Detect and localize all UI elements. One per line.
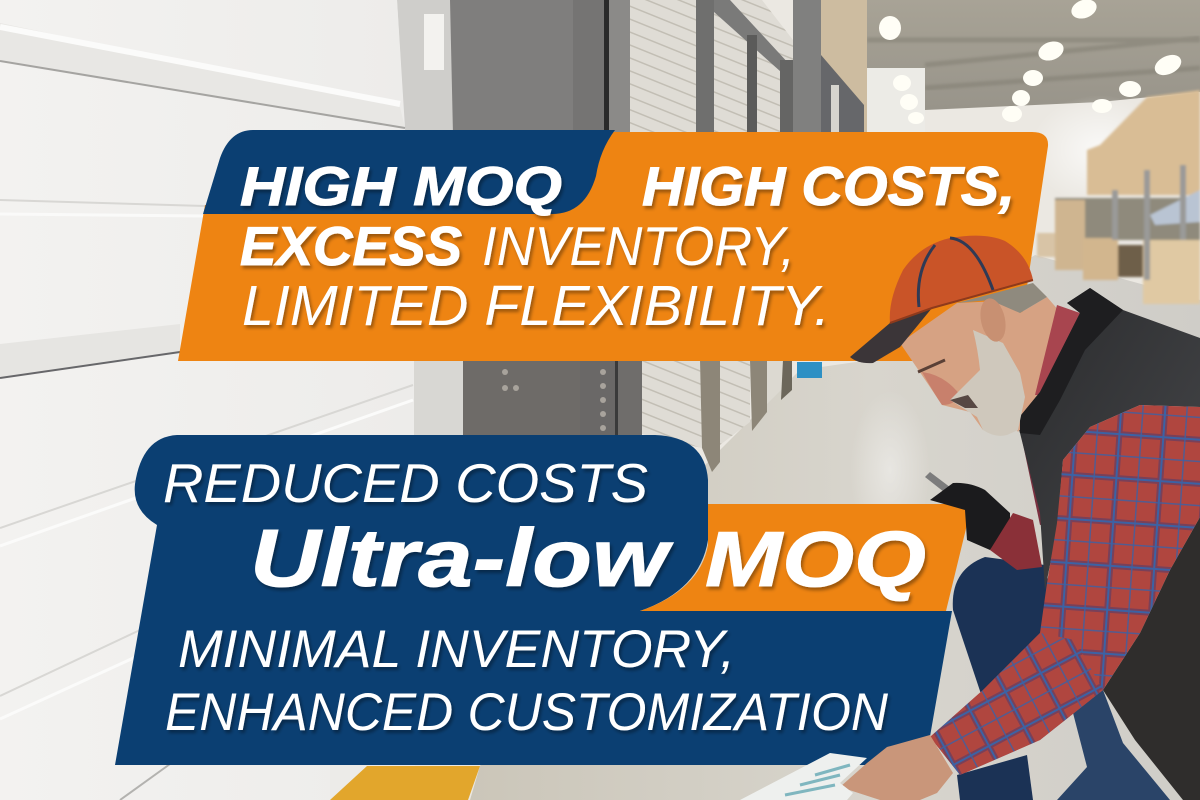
bottom banner: ultra-low MOQ <box>115 435 972 765</box>
heading text: INVENTORY, <box>482 215 795 277</box>
orange banner <box>178 132 1048 361</box>
storage doors <box>413 0 867 472</box>
heading text <box>240 155 1015 338</box>
hand <box>840 735 953 800</box>
orange tab <box>640 504 972 611</box>
heading text: LIMITED FLEXIBILITY. <box>242 274 830 338</box>
heading text: HIGH COSTS, <box>642 155 1015 217</box>
plaid sleeve <box>930 405 1200 775</box>
heading text: HIGH MOQ <box>240 155 562 217</box>
eye brow <box>918 360 945 372</box>
lower vest <box>1103 517 1200 800</box>
top rail band <box>0 23 405 128</box>
yellow pallet jack <box>330 766 480 800</box>
banner text: ENHANCED CUSTOMIZATION <box>165 683 889 742</box>
face <box>900 300 1020 430</box>
paper <box>740 753 867 800</box>
banner text <box>163 452 926 742</box>
banner text: MINIMAL INVENTORY, <box>178 620 735 679</box>
banner text: REDUCED COSTS <box>163 452 648 514</box>
lower door section <box>413 360 822 472</box>
worker <box>740 236 1200 800</box>
banner text: Ultra-low <box>250 513 674 604</box>
cap <box>850 236 1033 363</box>
ceiling lights <box>879 0 1184 124</box>
neck <box>1000 297 1060 432</box>
navy banner <box>115 435 952 765</box>
top banner: high MOQ <box>178 130 1048 361</box>
jeans <box>953 557 1170 800</box>
banner text: MOQ <box>705 515 926 603</box>
beard <box>950 330 1025 436</box>
pallets <box>1037 90 1200 304</box>
vest <box>1017 288 1200 590</box>
collar <box>1035 305 1080 395</box>
hair <box>957 283 1047 313</box>
ear <box>977 296 1009 344</box>
navy tab <box>203 130 615 214</box>
heading text: EXCESS <box>240 215 462 277</box>
floor <box>470 255 1200 800</box>
white roller door <box>0 0 453 800</box>
ceiling <box>867 0 1200 110</box>
phone and glove <box>925 472 1042 570</box>
inner shirt <box>1020 420 1062 525</box>
